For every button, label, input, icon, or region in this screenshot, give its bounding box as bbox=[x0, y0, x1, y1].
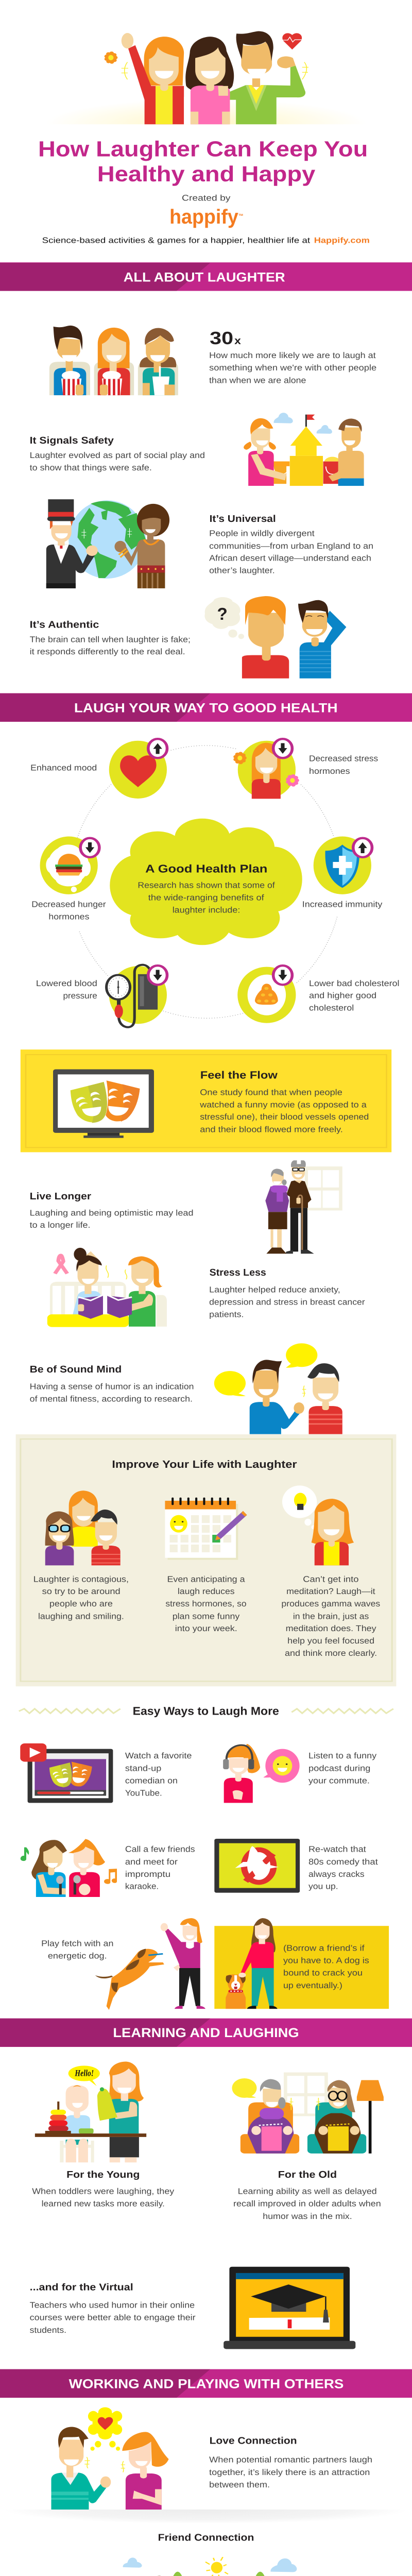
icon: cholesterol ring bbox=[243, 965, 292, 1019]
text: for the old: Learning ability as well as delayed bbox=[238, 2187, 377, 2196]
created by happify logo: TM bbox=[238, 213, 243, 216]
text: it's authentic: The brain can tell when laughter is fake; bbox=[30, 635, 191, 644]
text: love connection bbox=[209, 2435, 372, 2489]
text: call a few friends bbox=[125, 1844, 195, 1891]
panel: borrow a friend's dog: up eventually.) bbox=[283, 1980, 342, 1990]
text: it signals safety bbox=[30, 435, 205, 472]
text: call a few friends: and meet for bbox=[125, 1857, 178, 1866]
title: Healthy and Happy bbox=[97, 162, 315, 186]
cloud: a good health plan: laughter include: bbox=[173, 905, 240, 914]
text: it's universal: other’s laughter. bbox=[209, 566, 275, 575]
text: live longer: to a longer life. bbox=[30, 1220, 91, 1230]
illustration: friends reading in hospital bed bbox=[47, 1248, 167, 1327]
icon: blood pressure gauge bbox=[107, 965, 167, 1027]
section heading: all about laughter: ALL ABOUT LAUGHTER bbox=[124, 270, 285, 284]
text: for the old bbox=[233, 2169, 381, 2221]
text: it's universal: communities—from urban England to an bbox=[209, 541, 373, 550]
illustration: karaoke friends bbox=[21, 1839, 117, 1897]
icon: tablet playing comedy video bbox=[20, 1743, 113, 1803]
text: for the young: When toddlers were laughing, they bbox=[32, 2187, 174, 2196]
tagline: Happify.com bbox=[314, 236, 370, 245]
text: it signals safety: It Signals Safety bbox=[30, 435, 114, 446]
text: live longer: Live Longer bbox=[30, 1191, 91, 1201]
text: for the young bbox=[32, 2169, 174, 2208]
illustration: thinking woman and embarrassed man: ? bbox=[217, 604, 228, 623]
text: listen to a funny podcast: Listen to a funny bbox=[308, 1751, 376, 1760]
cloud: a good health plan bbox=[110, 819, 302, 945]
label: decreased hunger hormones: hormones bbox=[48, 912, 89, 921]
text: watch a favorite stand-up bbox=[125, 1751, 192, 1798]
label: decreased stress hormones: Decreased stress bbox=[309, 754, 378, 763]
text: be of sound mind: Be of Sound Mind bbox=[30, 1364, 122, 1375]
stat text: 30x: How much more likely we are to laugh at bbox=[209, 350, 376, 360]
text: and for the virtual: students. bbox=[30, 2325, 66, 2334]
illustration: cinema trio with popcorn bbox=[49, 326, 178, 395]
tip text columns: in the brain, just as bbox=[293, 1612, 369, 1621]
text: listen to a funny podcast: your commute. bbox=[308, 1776, 370, 1785]
text: it's authentic bbox=[30, 619, 191, 656]
label: decreased hunger hormones bbox=[31, 900, 106, 921]
text: stress less: patients. bbox=[209, 1310, 244, 1319]
text: watch a favorite stand-up: comedian on bbox=[125, 1776, 178, 1785]
tip text columns: laughing and smiling. bbox=[38, 1612, 124, 1621]
text: play fetch bbox=[41, 1939, 113, 1960]
tip text columns: plan some funny bbox=[173, 1612, 240, 1621]
tip text columns: so try to be around bbox=[42, 1586, 121, 1596]
heading: friend connection: Friend Connection bbox=[158, 2532, 254, 2543]
tip text columns: Can’t get into bbox=[303, 1574, 358, 1584]
text: for the old: recall improved in older adults when bbox=[233, 2199, 381, 2208]
text: and for the virtual: ...and for the Virtual bbox=[30, 2282, 133, 2293]
tip text columns: people who are bbox=[49, 1599, 113, 1608]
illustration: two men talking with speech bubbles bbox=[214, 1343, 342, 1434]
stat text: 30x: something when we're with other people bbox=[209, 363, 376, 372]
tip text columns: Laughter is contagious, bbox=[33, 1574, 129, 1584]
heading: easy ways to laugh more: Easy Ways to Laugh More bbox=[133, 1704, 279, 1717]
text: it's universal: It’s Universal bbox=[210, 513, 276, 524]
text: love connection: When potential romantic partners laugh bbox=[209, 2455, 372, 2464]
text: and for the virtual: Teachers who used humor in their online bbox=[30, 2300, 195, 2310]
text: love connection: between them. bbox=[209, 2480, 270, 2489]
hero illustration: three laughing friends bbox=[46, 31, 367, 124]
text: watch a favorite stand-up: Watch a favorite bbox=[125, 1751, 192, 1760]
text: call a few friends: karaoke. bbox=[125, 1882, 159, 1891]
text: call a few friends: impromptu bbox=[125, 1869, 170, 1878]
text: stress less bbox=[209, 1267, 365, 1319]
heading: easy ways to laugh more bbox=[19, 1704, 393, 1717]
label: decreased hunger hormones: Decreased hunger bbox=[31, 900, 106, 909]
icon: laptop with graduation cap bbox=[224, 2267, 355, 2349]
text: live longer: Laughing and being optimistic may lead bbox=[30, 1208, 194, 1217]
created by happify logo: happify bbox=[169, 206, 238, 228]
illustration: elderly couple by window bbox=[265, 1160, 342, 1253]
text: for the old: For the Old bbox=[278, 2169, 337, 2180]
section heading: working and playing with others bbox=[0, 2369, 412, 2398]
text: be of sound mind: of mental fitness, according to research. bbox=[30, 1394, 193, 1403]
illustration: children building sand castle bbox=[244, 413, 364, 486]
text: stress less: depression and stress in breast cancer bbox=[209, 1297, 365, 1307]
text: for the young: For the Young bbox=[66, 2169, 140, 2180]
illustration: couple with love thought bubble bbox=[51, 2408, 169, 2510]
created by happify logo bbox=[169, 193, 243, 228]
tip text columns: into your week. bbox=[175, 1623, 237, 1633]
tip text columns bbox=[33, 1574, 380, 1657]
illustration: older women knitting in armchairs bbox=[232, 2072, 384, 2154]
illustration: contagious laughter group bbox=[45, 1490, 121, 1565]
text: play fetch: Play fetch with an bbox=[41, 1939, 113, 1948]
dotted circle connecting benefits bbox=[78, 745, 337, 1018]
text: live longer bbox=[30, 1191, 194, 1230]
text: it signals safety: to show that things were safe. bbox=[30, 463, 152, 472]
text: listen to a funny podcast bbox=[308, 1751, 376, 1785]
label: lowered blood pressure: Lowered blood bbox=[36, 978, 97, 988]
text: and for the virtual: courses were better able to engage their bbox=[30, 2313, 196, 2322]
stat text: 30x bbox=[209, 328, 376, 385]
text: love connection: together, it’s likely there is an attraction bbox=[209, 2467, 370, 2477]
illustration: toddler with puppet and mother: Hello! bbox=[75, 2068, 94, 2078]
illustration: meditating idea woman bbox=[282, 1485, 354, 1565]
panel: feel the flow: stressful one), their blood vessels opened bbox=[200, 1112, 369, 1122]
text: it's authentic: It’s Authentic bbox=[30, 619, 99, 630]
illustration: woman playing fetch with dog bbox=[95, 1918, 205, 2010]
text: watch a favorite stand-up: YouTube. bbox=[125, 1788, 162, 1798]
stat text: 30x: x bbox=[234, 335, 241, 347]
text: be of sound mind: Having a sense of humor is an indication bbox=[30, 1382, 194, 1391]
panel: borrow a friend's dog: (Borrow a friend’s if bbox=[283, 1943, 365, 1953]
text: listen to a funny podcast: podcast during bbox=[308, 1764, 370, 1773]
tip text columns: Even anticipating a bbox=[167, 1574, 245, 1584]
text: for the young: learned new tasks more easily. bbox=[42, 2199, 165, 2208]
tip text columns: and think more clearly. bbox=[285, 1648, 377, 1657]
stat text: 30x: 30 bbox=[210, 328, 233, 348]
panel: borrow a friend's dog bbox=[214, 1918, 389, 2009]
text: watch a favorite stand-up: stand-up bbox=[125, 1764, 161, 1773]
panel: improve your life with laughter bbox=[16, 1434, 396, 1686]
panel: feel the flow: One study found that when people bbox=[200, 1088, 342, 1097]
illustration: calendar with pencil bbox=[165, 1498, 247, 1560]
text: re-watch 80s comedy: 80s comedy that bbox=[308, 1857, 378, 1866]
text: be of sound mind bbox=[30, 1364, 194, 1403]
label: lower bad cholesterol: and higher good bbox=[309, 991, 376, 1000]
stat text: 30x: than when we are alone bbox=[209, 376, 306, 385]
section heading: working and playing with others: WORKING AND PLAYING WITH OTHERS bbox=[69, 2376, 344, 2391]
panel: feel the flow: watched a funny movie (as opposed to a bbox=[200, 1100, 367, 1109]
label: lower bad cholesterol bbox=[309, 978, 400, 1012]
cloud: a good health plan: Research has shown that some of bbox=[138, 880, 275, 890]
panel: borrow a friend's dog: bound to crack you bbox=[283, 1968, 363, 1977]
cloud: a good health plan: A Good Health Plan bbox=[145, 862, 267, 875]
text: for the old: humor was in the mix. bbox=[263, 2211, 352, 2221]
illustration: girl with headphones and podcast bubble bbox=[223, 1744, 300, 1803]
panel: borrow a friend's dog: you have to. A dog is bbox=[283, 1956, 369, 1965]
text: it's universal: African desert village—understand each bbox=[209, 553, 371, 563]
ground shadow: love connection bbox=[4, 2510, 408, 2524]
text: it's authentic: it responds differently to the real deal. bbox=[30, 647, 185, 656]
label: lower bad cholesterol: cholesterol bbox=[309, 1003, 354, 1012]
text: and for the virtual bbox=[30, 2282, 196, 2334]
created by happify logo: Created by bbox=[182, 193, 231, 202]
text: play fetch: energetic dog. bbox=[48, 1951, 107, 1960]
section heading: learning and laughing bbox=[0, 2019, 412, 2047]
text: re-watch 80s comedy: Re-watch that bbox=[308, 1844, 366, 1854]
label: enhanced mood: Enhanced mood bbox=[30, 763, 97, 772]
tip text columns: meditation? Laugh—it bbox=[286, 1586, 375, 1596]
illustration: thinking woman and embarrassed man bbox=[204, 596, 346, 679]
panel: feel the flow: Feel the Flow bbox=[200, 1069, 278, 1081]
tip text columns: help you feel focused bbox=[287, 1636, 374, 1646]
text: it signals safety: Laughter evolved as part of social play and bbox=[30, 450, 205, 460]
label: decreased stress hormones: hormones bbox=[309, 766, 350, 775]
label: increased immunity: Increased immunity bbox=[302, 900, 383, 909]
icon: heart, enhanced mood bbox=[109, 739, 167, 799]
icon: shield, increased immunity bbox=[314, 837, 372, 894]
text: call a few friends: Call a few friends bbox=[125, 1844, 195, 1854]
title: How Laughter Can Keep You bbox=[38, 137, 368, 161]
section heading: laugh your way to good health: LAUGH YOUR WAY TO GOOD HEALTH bbox=[74, 700, 338, 715]
illustration: park bench with strangers and dog bbox=[123, 2557, 297, 2576]
icon: TV with no-ghost sign bbox=[214, 1839, 300, 1893]
tagline: Science-based activities & games for a happier, healthier life at bbox=[42, 236, 310, 245]
text: re-watch 80s comedy: you up. bbox=[308, 1882, 338, 1891]
tip text columns: produces gamma waves bbox=[281, 1599, 380, 1608]
tip text columns: laugh reduces bbox=[178, 1586, 235, 1596]
text: stress less: Laughter helped reduce anxiety, bbox=[209, 1285, 340, 1294]
text: stress less: Stress Less bbox=[210, 1267, 266, 1278]
panel: feel the flow bbox=[21, 1049, 391, 1152]
illustration: toddler with puppet and mother bbox=[35, 2062, 146, 2162]
icon: relaxed woman, decreased stress bbox=[235, 739, 297, 799]
tip text columns: meditation does. They bbox=[286, 1623, 376, 1633]
section heading: learning and laughing: LEARNING AND LAUGHING bbox=[113, 2025, 299, 2040]
section heading: all about laughter bbox=[0, 262, 412, 291]
label: lowered blood pressure bbox=[36, 978, 97, 1000]
panel: feel the flow: and their blood flowed more freely. bbox=[200, 1125, 343, 1134]
cloud: a good health plan: the wide-ranging benefits of bbox=[148, 893, 264, 902]
text: re-watch 80s comedy: always cracks bbox=[308, 1869, 365, 1878]
label: lowered blood pressure: pressure bbox=[63, 991, 97, 1000]
illustration: globe with gentleman and woman bbox=[46, 499, 169, 588]
icon: burger thought, decreased hunger bbox=[40, 837, 99, 894]
text: love connection: Love Connection bbox=[210, 2435, 297, 2446]
label: decreased stress hormones bbox=[309, 754, 378, 775]
text: it's universal: People in wildly divergent bbox=[209, 529, 315, 538]
panel: improve your life with laughter: Improve Your Life with Laughter bbox=[112, 1459, 297, 1470]
title bbox=[38, 137, 368, 186]
text: re-watch 80s comedy bbox=[308, 1844, 378, 1891]
tip text columns: stress hormones, so bbox=[165, 1599, 247, 1608]
section heading: laugh your way to good health bbox=[0, 693, 412, 722]
label: lower bad cholesterol: Lower bad cholesterol bbox=[309, 978, 400, 988]
text: it's universal bbox=[209, 513, 373, 575]
